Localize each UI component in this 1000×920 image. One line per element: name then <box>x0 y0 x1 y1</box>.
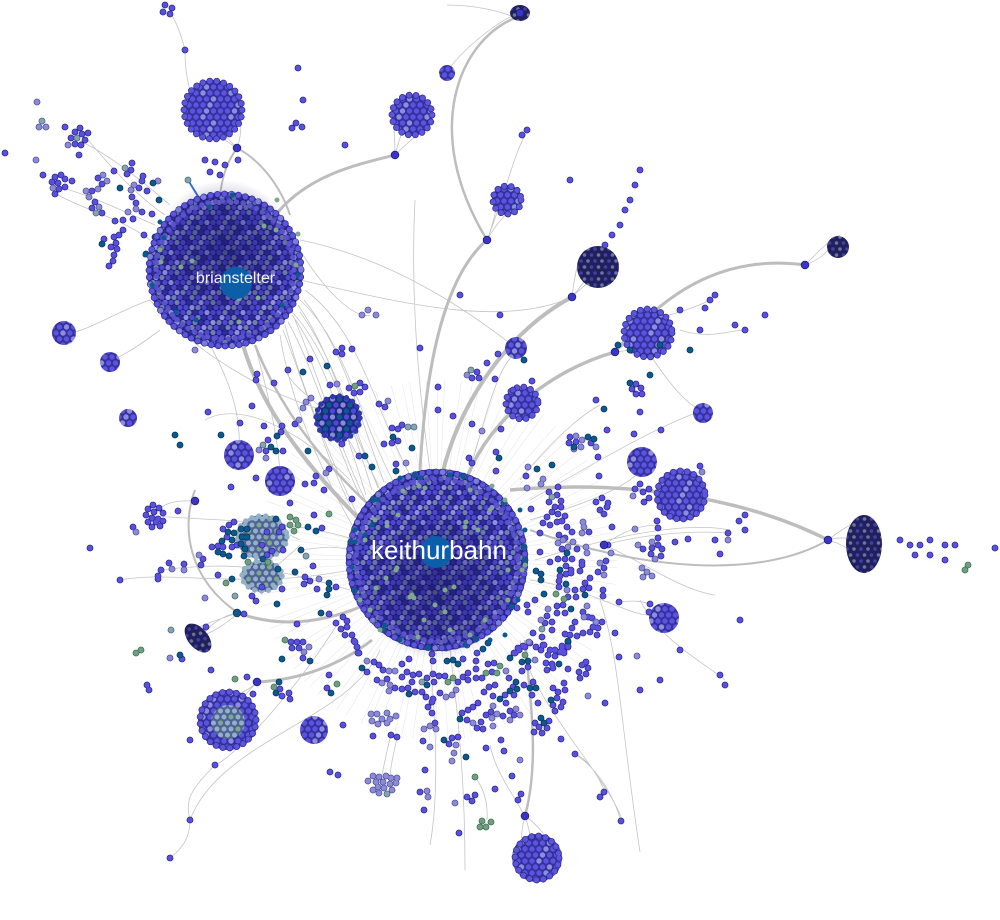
thin connecting edges <box>58 5 870 870</box>
cluster: upper centre <box>492 185 522 215</box>
cluster: bottom large <box>512 834 562 882</box>
teal nodes <box>102 183 690 757</box>
cluster: upper middle <box>391 94 433 136</box>
hub nodes <box>195 13 828 816</box>
green nodes <box>136 386 968 827</box>
cluster: dark crescent upper right <box>577 246 619 288</box>
teal hub node lower left <box>233 609 241 617</box>
green and teal accents <box>352 475 525 645</box>
blue edge near brianstelter <box>188 180 204 206</box>
cluster: dark far upper right <box>827 236 849 258</box>
cluster: top left of brianstelter <box>183 80 243 140</box>
cluster: greenish lower lobe <box>241 560 283 592</box>
cluster: keithurbahn <box>346 469 528 660</box>
brianstelter hub node <box>220 267 252 299</box>
cluster: dark tilted lower left <box>179 619 217 657</box>
cluster: mixed teal right <box>623 308 673 358</box>
cluster: small dark top <box>510 5 530 21</box>
cluster: lower left large <box>198 690 258 750</box>
cluster: at 642,462 <box>627 447 657 477</box>
radial fan around keithurbahn <box>302 425 572 695</box>
cluster: above keithurbahn right <box>505 386 539 420</box>
cluster: right large <box>655 469 707 521</box>
keithurbahn hub node <box>420 536 452 568</box>
cluster: brianstelter <box>145 180 303 348</box>
brianstelter label: brianstelter <box>196 270 276 287</box>
thin curved fans <box>58 5 870 870</box>
green and teal accents <box>145 195 298 322</box>
cluster: small at 516,348 <box>505 337 527 359</box>
cluster: at 280,481 <box>265 466 295 496</box>
cluster: teal mix left of keithurbahn <box>315 395 361 441</box>
cluster: small top <box>439 65 455 81</box>
grey blue nodes <box>42 121 552 794</box>
dense node clusters <box>52 5 882 882</box>
cluster: at 664,618 <box>649 603 679 633</box>
cluster: at 110,362 <box>100 352 120 372</box>
cluster: at 314,730 <box>300 716 328 744</box>
cluster: dark far right <box>846 515 882 573</box>
light violet nodes <box>36 102 728 803</box>
cluster: greenish upper lobe <box>236 515 288 559</box>
cluster: at 128,418 <box>119 409 137 427</box>
cluster: at 239,455 <box>224 440 254 470</box>
keithurbahn label: keithurbahn <box>371 535 507 565</box>
cluster: small right <box>693 403 713 423</box>
thick bundled edges <box>189 18 828 816</box>
cluster: at 64,333 <box>52 321 76 345</box>
